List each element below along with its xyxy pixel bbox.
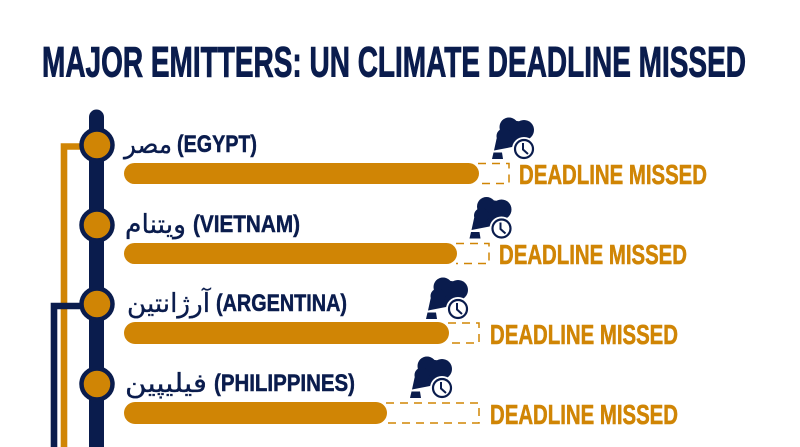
country label: آرژانتین <box>127 287 212 319</box>
deadline missed label: DEADLINE MISSED <box>490 319 678 350</box>
timeline spine <box>89 110 104 447</box>
timeline connector: orange branch <box>64 146 85 447</box>
country label <box>125 369 355 399</box>
icon: smoke stack with clock <box>410 356 454 400</box>
icon: smoke stack with clock <box>492 118 536 161</box>
row: Egypt <box>82 118 707 190</box>
country label <box>122 130 257 160</box>
deadline missed label: DEADLINE MISSED <box>490 399 678 430</box>
node <box>82 288 112 320</box>
timeline connector: navy branch <box>54 306 85 447</box>
country label: (EGYPT) <box>177 131 257 158</box>
country label: (ARGENTINA) <box>216 290 347 317</box>
node <box>82 210 112 240</box>
country label: ويتنام <box>125 210 186 240</box>
row: Philippines <box>82 356 678 430</box>
icon: smoke stack with clock <box>470 197 514 240</box>
progress bar <box>124 243 457 264</box>
dashed remainder <box>456 244 489 264</box>
country label: (PHILIPPINES) <box>214 370 355 397</box>
node <box>82 130 112 160</box>
row: Argentina <box>82 278 678 350</box>
dashed remainder <box>386 403 479 423</box>
country label <box>127 287 347 319</box>
row: Vietnam <box>82 197 687 270</box>
deadline missed label: DEADLINE MISSED <box>519 159 707 190</box>
dashed remainder <box>478 164 509 184</box>
node <box>82 368 112 400</box>
progress bar <box>124 322 449 344</box>
progress bar <box>124 163 479 184</box>
dashed remainder <box>448 323 479 343</box>
progress bar <box>124 402 387 424</box>
icon: smoke stack with clock <box>426 278 470 321</box>
deadline missed label: DEADLINE MISSED <box>499 239 687 270</box>
country label: مصر <box>122 130 172 160</box>
country label: (VIETNAM) <box>193 211 300 238</box>
country label <box>125 210 300 240</box>
country label: فیلیپین <box>125 369 207 399</box>
